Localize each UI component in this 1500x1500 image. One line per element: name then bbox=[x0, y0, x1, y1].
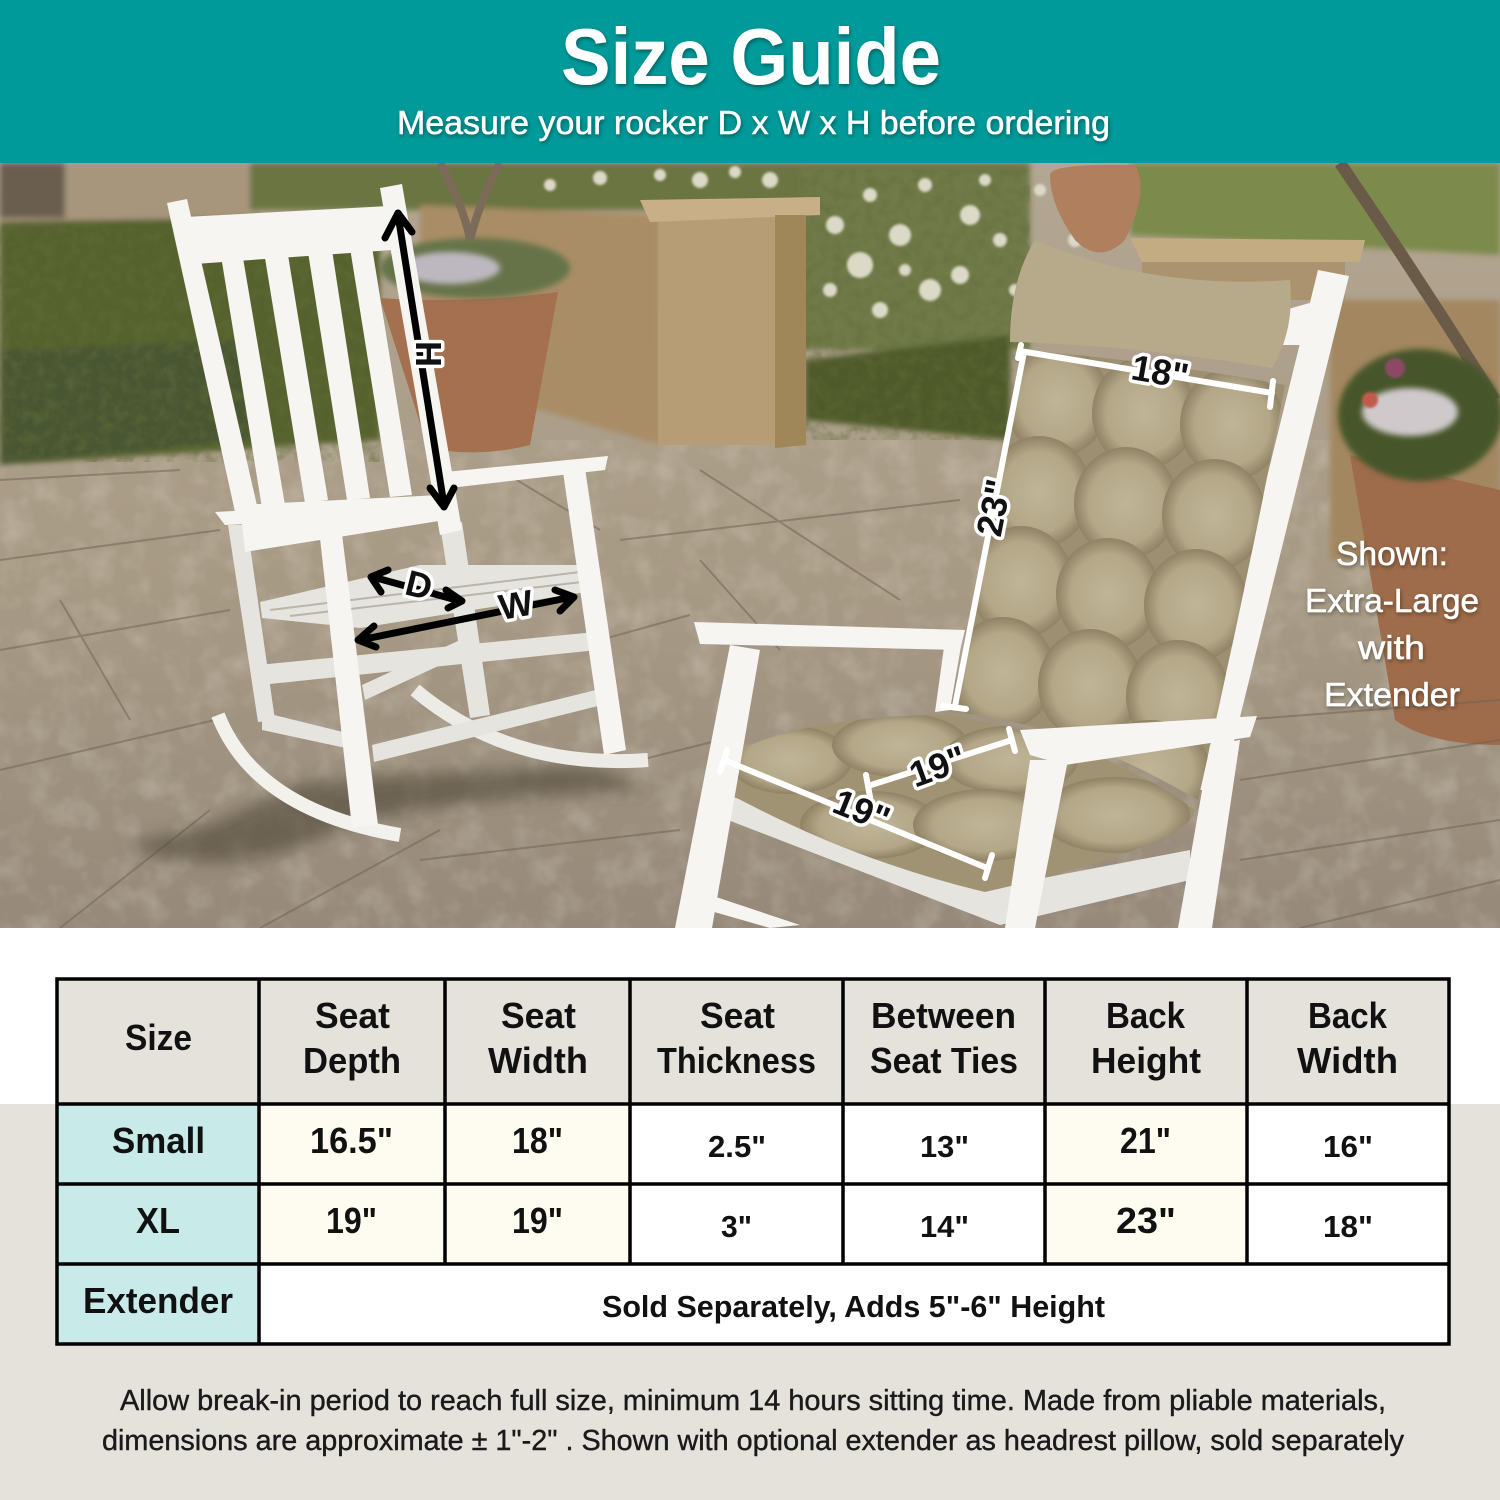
dimension: D arrow bbox=[371, 562, 462, 608]
table cell fills bbox=[57, 979, 1449, 1344]
table header row: Seat Ties bbox=[870, 1040, 1018, 1081]
caption: shown size: Extra-Large bbox=[1305, 582, 1479, 619]
table header row: Back bbox=[1308, 995, 1388, 1036]
row: XL: 23" bbox=[1116, 1200, 1176, 1241]
dimension: H arrow: H bbox=[408, 341, 449, 367]
row: XL bbox=[136, 1200, 1373, 1244]
left chair rear legs bbox=[228, 525, 275, 722]
header banner bbox=[0, 0, 1500, 163]
tree trunks bbox=[440, 163, 500, 240]
headrest pillow bbox=[1010, 240, 1291, 368]
right chair front rail and seat slats bbox=[715, 790, 1190, 925]
stone wall pillar bbox=[640, 197, 820, 448]
table header row: Seat bbox=[700, 995, 775, 1036]
dimension: 18 inch back width bbox=[1018, 345, 1273, 407]
row: Small: 13" bbox=[920, 1129, 969, 1164]
table header row: Back bbox=[1106, 995, 1186, 1036]
patio background scene bbox=[0, 163, 1500, 928]
photo: patio with two rocking chairs bbox=[0, 163, 1500, 928]
table header row: Depth bbox=[303, 1040, 401, 1081]
dimension: D arrow: D bbox=[401, 562, 437, 608]
caption: shown size: Shown: bbox=[1336, 535, 1448, 572]
dimension: 19 inch seat width bbox=[720, 750, 992, 878]
caption: shown size: with bbox=[1357, 629, 1425, 666]
row: Extender bbox=[83, 1280, 1105, 1324]
urn and background wall right bbox=[1050, 163, 1495, 400]
size table bbox=[57, 979, 1449, 1344]
row: Extender: Sold Separately, Adds 5"-6" Height bbox=[602, 1289, 1105, 1324]
row: Small: 16" bbox=[1323, 1129, 1373, 1164]
back cushion tufts bbox=[951, 345, 1284, 820]
left chair back slats bbox=[222, 247, 412, 508]
row: XL: 3" bbox=[721, 1209, 752, 1244]
left chair rockers bbox=[218, 715, 400, 835]
dimension: H arrow bbox=[385, 213, 454, 507]
white roses bbox=[544, 166, 1082, 318]
dimension: 19 inch seat depth: 19" bbox=[904, 737, 972, 795]
row: XL: 18" bbox=[1323, 1209, 1373, 1244]
seat cushion tufts bbox=[728, 713, 1190, 861]
right chair arms and posts bbox=[675, 622, 1257, 928]
left chair seat bbox=[260, 565, 586, 628]
row: XL: 19" bbox=[326, 1200, 377, 1241]
subtitle: Measure your rocker D x W x H before ordering bbox=[397, 104, 1110, 141]
dimension: 18 inch back width: 18" bbox=[1128, 347, 1192, 397]
footnote: Allow break-in period to reach full size, minimum 14 hours sitting time. Made from pliable materials, bbox=[120, 1385, 1386, 1417]
row: Small: Small bbox=[112, 1120, 205, 1161]
row: XL: 14" bbox=[920, 1209, 969, 1244]
table header row: Width bbox=[1297, 1040, 1398, 1081]
dimension: W arrow: W bbox=[496, 582, 536, 628]
shadow under left chair bbox=[125, 765, 650, 862]
table header row: Height bbox=[1091, 1040, 1201, 1081]
caption: shown size bbox=[1305, 535, 1479, 713]
back cushion bbox=[950, 350, 1285, 800]
foliage texture bbox=[0, 222, 380, 462]
dimension: W arrow bbox=[358, 582, 574, 647]
stone paving bbox=[0, 470, 1500, 928]
left chair back posts bbox=[167, 184, 462, 552]
left chair rungs bbox=[258, 632, 606, 762]
dimension: 23 inch back height: 23" bbox=[968, 476, 1019, 540]
title: Size Guide bbox=[561, 12, 941, 101]
table header row: Seat bbox=[315, 995, 390, 1036]
footnote: dimensions are approximate ± 1"-2" . Shown with optional extender as headrest pillow, sold separately bbox=[102, 1425, 1404, 1457]
table grid bbox=[57, 979, 1449, 1344]
dimension: 23 inch back height bbox=[943, 352, 1024, 709]
terracotta pot left bbox=[380, 238, 570, 452]
terracotta pot right with flowers bbox=[1338, 349, 1500, 745]
dimension: 19 inch seat width: 19" bbox=[828, 781, 896, 840]
right chair back post bbox=[1190, 270, 1349, 790]
row: Small: 2.5" bbox=[708, 1129, 766, 1164]
dimension: 19 inch seat depth bbox=[866, 729, 1015, 797]
caption: shown size: Extender bbox=[1324, 676, 1460, 713]
row: Small: 16.5" bbox=[310, 1120, 393, 1161]
row: Small: 18" bbox=[512, 1120, 563, 1161]
row: XL: XL bbox=[136, 1200, 180, 1241]
row: Extender: Extender bbox=[83, 1280, 233, 1321]
table header row bbox=[125, 995, 1398, 1081]
table header row: Seat bbox=[501, 995, 576, 1036]
row: XL: 19" bbox=[512, 1200, 563, 1241]
left chair arms and front posts bbox=[215, 456, 626, 828]
row: Small bbox=[112, 1120, 1373, 1164]
table header row: Thickness bbox=[657, 1040, 816, 1081]
row: Small: 21" bbox=[1120, 1120, 1171, 1161]
table header row: Between bbox=[871, 995, 1016, 1036]
seat cushion bbox=[722, 715, 1195, 892]
table header row: Size bbox=[125, 1017, 192, 1058]
footnote bbox=[102, 1385, 1404, 1457]
right rocking chair with cushion bbox=[675, 240, 1349, 928]
left rocking chair bbox=[167, 184, 648, 835]
table header row: Width bbox=[488, 1040, 588, 1081]
